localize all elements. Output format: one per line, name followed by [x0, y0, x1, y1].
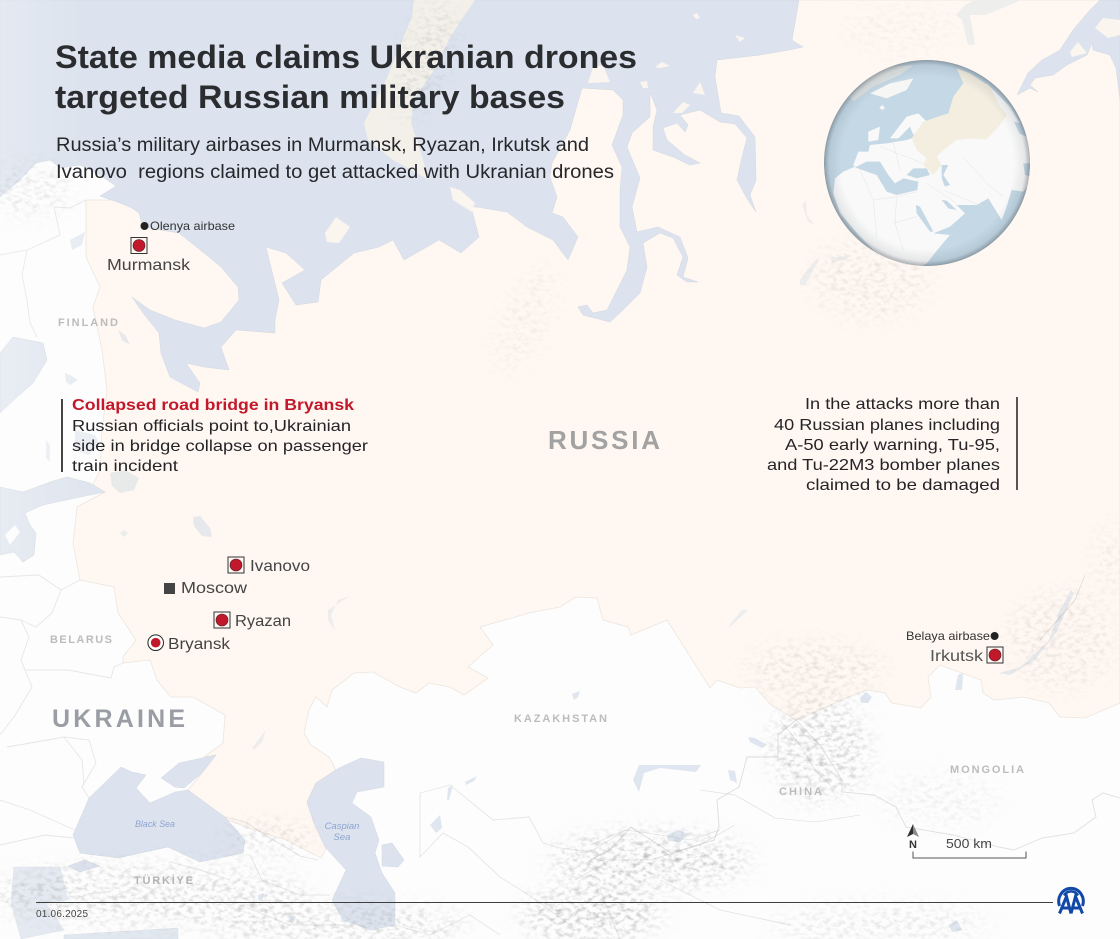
icon: north arrow	[907, 824, 919, 851]
map: Mediterranean Sea	[64, 928, 178, 939]
callout: collapsed bridge: Russian officials point to,Ukrainian	[72, 418, 351, 435]
globe: UK and Ireland	[868, 127, 880, 142]
label: Kazakhstan: KAZAKHSTAN	[514, 713, 607, 725]
marker: Murmansk	[107, 238, 191, 274]
map: Baltic Sea	[0, 477, 105, 562]
map: top-left fade	[0, 0, 90, 560]
map: country borders	[0, 200, 1120, 939]
label: Caspian Sea: Sea	[334, 832, 350, 843]
callout: planes damaged: and Tu-22M3 bomber planes	[767, 457, 1000, 474]
label: Caspian Sea	[325, 821, 359, 843]
globe: Caspian Sea	[942, 165, 950, 187]
map: Garabogaz bay	[382, 843, 404, 867]
callout: collapsed bridge: Collapsed road bridge in Bryansk	[72, 397, 354, 414]
map: Khatanga gulf	[1017, 0, 1120, 100]
globe: Pacific side sea	[1014, 122, 1026, 137]
globe: land of Europe, Asia, Africa	[833, 83, 1037, 273]
subtitle: Ivanovo regions claimed to get attacked with Ukranian drones	[56, 162, 614, 183]
globe: borders	[860, 143, 1003, 250]
callout: planes damaged: claimed to be damaged	[806, 477, 1000, 494]
map: Tian Shan and Altai ridges	[225, 575, 1085, 880]
label: Caspian Sea: Caspian	[325, 821, 359, 832]
marker: Bryansk	[148, 635, 231, 653]
map: Volga reservoirs	[328, 596, 350, 631]
label: Black Sea: Black Sea	[135, 819, 175, 830]
globe: ocean	[824, 60, 1030, 266]
label: Olenya airbase: Olenya airbase	[150, 219, 235, 233]
callout: collapsed bridge	[61, 397, 369, 475]
title: State media claims Ukranian drones	[55, 39, 637, 75]
label: Finland: FINLAND	[58, 317, 118, 329]
map: Taymyr gulf islands	[1095, 18, 1120, 38]
marker: Irkutsk: Irkutsk	[930, 648, 984, 665]
marker: Ivanovo: Ivanovo	[250, 558, 310, 575]
callout: planes damaged: A-50 early warning, Tu-95,	[785, 437, 1000, 454]
label: Turkiye: TÜRKİYE	[134, 874, 193, 887]
label: Ukraine: UKRAINE	[52, 705, 185, 733]
map: Finland lakes	[65, 373, 78, 385]
globe: Mediterranean	[855, 162, 918, 195]
globe: Persian Gulf	[942, 200, 957, 210]
globe locator	[824, 60, 1037, 273]
callout: planes damaged	[767, 396, 1018, 494]
map: Aegean Sea	[11, 867, 68, 939]
map: Rybinsk reservoir	[193, 516, 212, 537]
subtitle: Russia’s military airbases in Murmansk, Ryazan, Irkutsk and	[56, 135, 589, 156]
subtitle	[56, 135, 614, 183]
icon: AA logo	[1059, 888, 1083, 914]
label: Belarus: BELARUS	[50, 634, 112, 646]
map: Central Asia lakes	[258, 610, 963, 932]
map: Lake Baikal	[999, 590, 1074, 675]
callout: collapsed bridge: train incident	[72, 458, 179, 475]
scale bar	[913, 836, 1026, 858]
callout: planes damaged: 40 Russian planes including	[774, 417, 1000, 434]
globe: Black Sea	[907, 168, 930, 178]
marker: Murmansk: Murmansk	[107, 257, 191, 274]
map: Lake Ladoga	[110, 470, 139, 493]
globe: Russia	[912, 68, 1007, 175]
icon: north arrow: N	[909, 839, 917, 851]
marker: Irkutsk	[930, 647, 1003, 665]
map: Baltic islands	[5, 525, 20, 545]
label: Mongolia: MONGOLIA	[950, 764, 1024, 776]
date: 01.06.2025	[36, 909, 88, 920]
map: Arctic Ocean and Kara Sea	[0, 0, 803, 392]
marker: Moscow: Moscow	[181, 580, 247, 597]
map: islands	[325, 0, 1120, 243]
globe: spherical rim shading	[824, 60, 1030, 266]
map: Gulf of Bothnia	[0, 337, 47, 413]
map: Kolguev	[325, 217, 350, 243]
map: Sea of Marmara	[68, 860, 100, 872]
globe: Red Sea	[916, 205, 933, 232]
map: Bely island	[588, 65, 610, 83]
map: Black Sea	[73, 767, 245, 862]
marker: Bryansk: Bryansk	[168, 636, 231, 653]
label: Belaya airbase: Belaya airbase	[906, 629, 990, 643]
callout: collapsed bridge: side in bridge collapse on passenger	[72, 438, 369, 455]
map: Vaygach	[450, 187, 475, 212]
globe: Scandinavia	[890, 113, 927, 138]
callout: planes damaged: In the attacks more than	[805, 396, 1000, 413]
globe: Greenland and Iceland	[870, 78, 913, 98]
map: Novaya Zemlya	[364, 0, 475, 180]
marker: Ivanovo	[228, 557, 310, 575]
title	[55, 39, 637, 115]
footer rule	[36, 902, 1053, 903]
marker: Ryazan	[214, 612, 291, 630]
map: Taymyr lakes	[956, 0, 1021, 45]
scale bar: 500 km	[946, 836, 992, 851]
map: Caspian Sea	[307, 758, 395, 930]
map: Sea of Azov	[161, 755, 216, 788]
title: targeted Russian military bases	[55, 79, 565, 115]
label: Russia: RUSSIA	[548, 425, 660, 455]
marker: Ryazan: Ryazan	[235, 613, 291, 630]
label: China: CHINA	[779, 786, 822, 798]
